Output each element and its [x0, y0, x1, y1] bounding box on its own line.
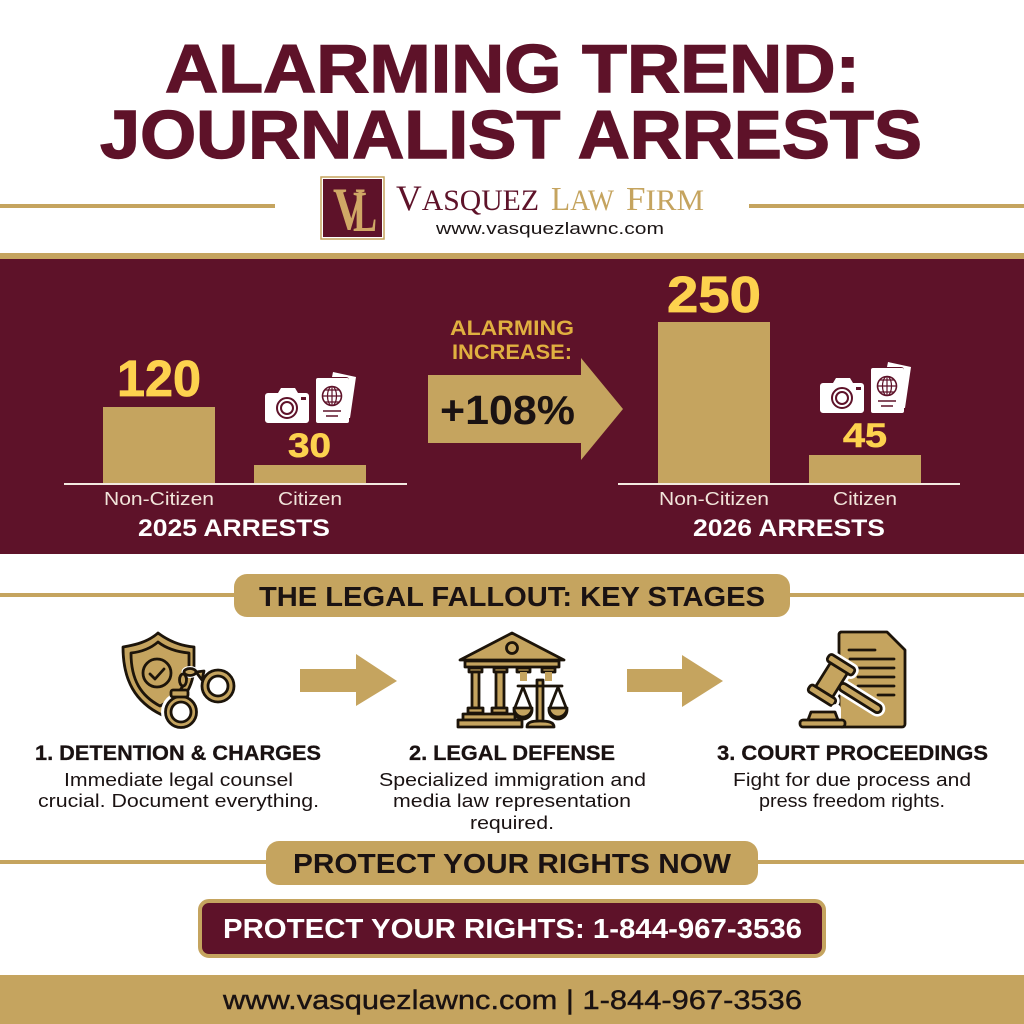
- title: ALARMING TREND:: [165, 31, 860, 107]
- heading: protect your rights now: [0, 841, 1024, 885]
- icon: camera and passport: [265, 372, 356, 423]
- stage 3: court proceedings: 3. COURT PROCEEDINGS: [717, 742, 988, 765]
- bar chart: 2026 arrests: Non-Citizen: [659, 489, 769, 509]
- logo mark: L: [353, 179, 377, 244]
- arrow: stage two to three: [627, 655, 723, 707]
- stage 2: legal defense: 2. LEGAL DEFENSE: [409, 742, 615, 765]
- heading: protect your rights now: PROTECT YOUR RIGHTS NOW: [293, 848, 732, 879]
- stage 3: court proceedings: [717, 742, 988, 811]
- footer: www.vasquezlawnc.com | 1-844-967-3536: [222, 985, 802, 1015]
- stage 1: detention and charges: 1. DETENTION & CHARGES: [35, 742, 321, 765]
- firm name: FIRM: [626, 181, 704, 218]
- bar chart: 2025 arrests: 120: [117, 350, 201, 407]
- logo mark: [321, 176, 384, 244]
- heading: the legal fallout: [0, 574, 1024, 617]
- bar chart: 2025 arrests: [64, 350, 407, 542]
- icon: courthouse and scales: [458, 633, 567, 727]
- callout: alarming increase: ALARMING: [450, 317, 574, 340]
- firm name: LAW: [551, 181, 615, 218]
- stage 1: detention and charges: [35, 742, 321, 811]
- firm name: [396, 178, 704, 218]
- stage 1: detention and charges: crucial. Document everything.: [38, 791, 319, 811]
- bar chart: 2025 arrests: Citizen: [278, 489, 342, 509]
- stage 2: legal defense: [379, 742, 646, 833]
- icon: shield and handcuffs: [123, 633, 239, 732]
- stage 2: legal defense: required.: [470, 813, 554, 833]
- stage 3: court proceedings: Fight for due process and: [733, 770, 971, 790]
- footer: [0, 975, 1024, 1024]
- title: [100, 31, 922, 173]
- call to action button: PROTECT YOUR RIGHTS: 1-844-967-3536: [223, 913, 802, 944]
- call to action button: [200, 901, 824, 956]
- bar chart: 2026 arrests: [618, 266, 960, 542]
- stage 2: legal defense: Specialized immigration and: [379, 770, 646, 790]
- heading: the legal fallout: THE LEGAL FALLOUT: KEY STAGES: [259, 581, 765, 612]
- callout: alarming increase: +108%: [440, 387, 575, 433]
- bar chart: 2025 arrests: 30: [288, 427, 331, 465]
- bar chart: 2026 arrests: 250: [667, 266, 761, 323]
- stage 1: detention and charges: Immediate legal counsel: [64, 770, 293, 790]
- bar chart: 2025 arrests: Non-Citizen: [104, 489, 214, 509]
- firm website: www.vasquezlawnc.com: [435, 219, 664, 238]
- firm name: VASQUEZ: [396, 178, 539, 218]
- icon: camera and passport: [820, 362, 911, 413]
- icon: gavel and document: [800, 632, 905, 729]
- bar chart: 2025 arrests: 2025 ARRESTS: [138, 515, 330, 542]
- stage 2: legal defense: media law representation: [393, 791, 631, 811]
- title: JOURNALIST ARRESTS: [100, 97, 922, 173]
- bar chart: 2026 arrests: 2026 ARRESTS: [693, 515, 885, 542]
- bar chart: 2026 arrests: 45: [843, 417, 887, 455]
- bar chart: 2026 arrests: Citizen: [833, 489, 897, 509]
- logo mark: V: [333, 176, 365, 242]
- panel: arrests comparison: [0, 253, 1024, 554]
- callout: alarming increase: INCREASE:: [452, 341, 572, 364]
- stage 3: court proceedings: press freedom rights.: [759, 791, 945, 811]
- logo header: [0, 176, 1024, 244]
- arrow: stage one to two: [300, 654, 397, 706]
- callout: alarming increase: [428, 317, 623, 460]
